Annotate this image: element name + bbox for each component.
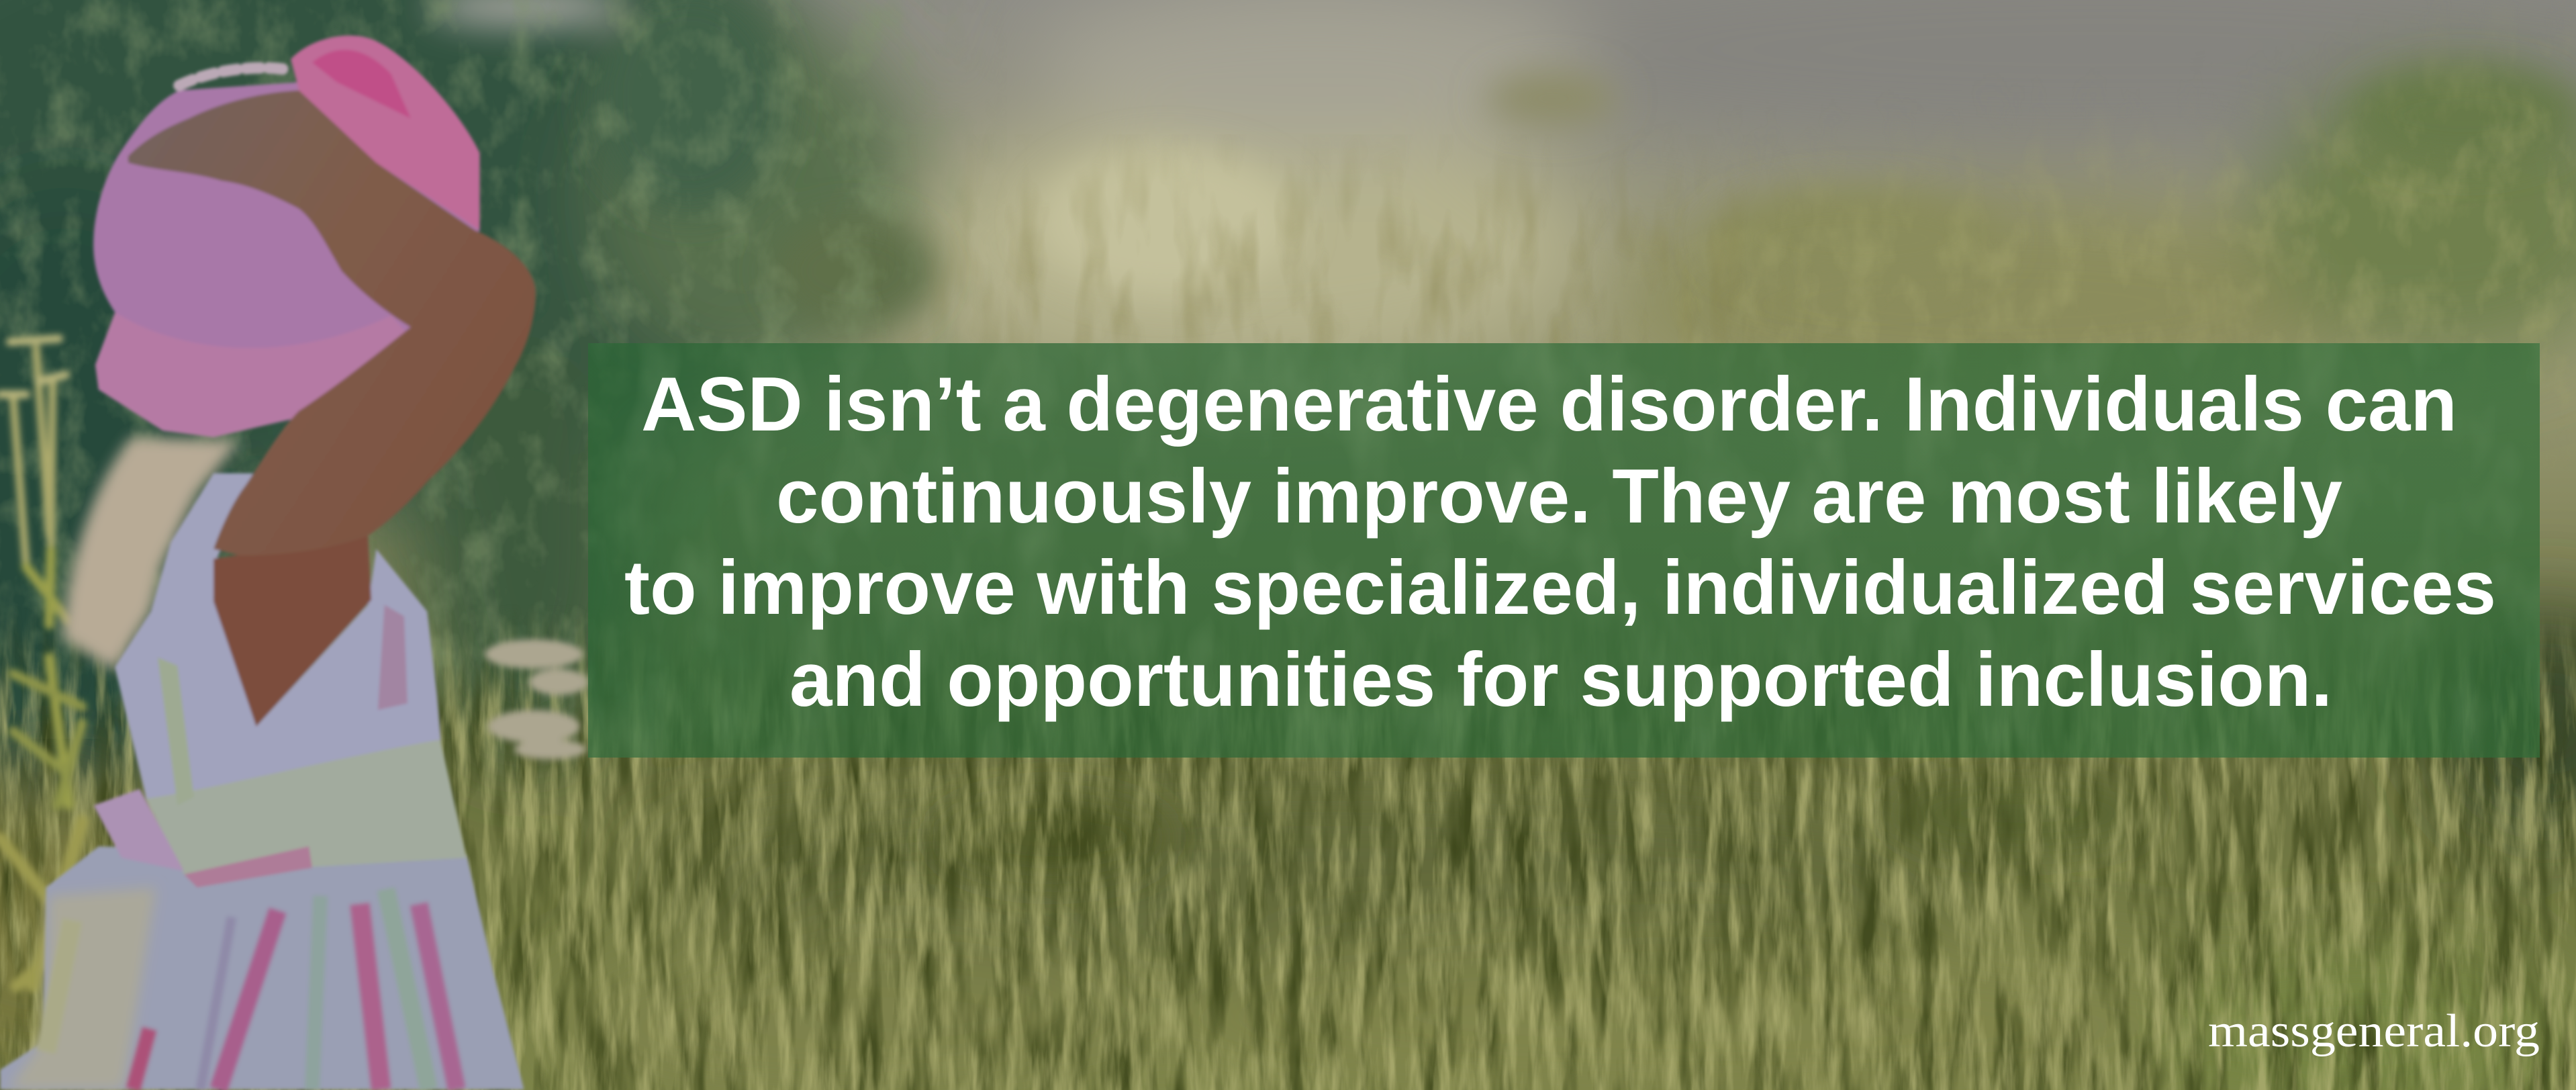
dress bodice bbox=[115, 473, 467, 874]
dress waist band bbox=[146, 739, 467, 874]
main statement text: ASD isn’t a degenerative disorder. Individuals can bbox=[641, 362, 2457, 447]
skirt stripes bbox=[46, 889, 457, 1089]
main statement text: and opportunities for supported inclusion. bbox=[790, 637, 2332, 723]
skirt left pale panel bbox=[8, 887, 156, 1089]
source wordmark: massgeneral.org bbox=[2208, 1005, 2540, 1057]
tree texture upper left bbox=[0, 0, 892, 739]
sky glow and dark tree edges bbox=[427, 0, 2576, 881]
dress bow bbox=[93, 789, 184, 871]
dress strap stripes bbox=[378, 605, 408, 710]
foreground plants at left edge bbox=[0, 338, 99, 986]
white flowers beside the girl bbox=[485, 639, 588, 760]
main statement text: to improve with specialized, individualized services bbox=[624, 545, 2496, 631]
text panel: green translucent box bbox=[588, 343, 2540, 758]
raised arm bbox=[128, 91, 536, 555]
hair bbox=[62, 437, 240, 670]
dress skirt bbox=[0, 846, 524, 1089]
girl in pink hat and striped dress bbox=[0, 36, 536, 1089]
hat lace trim bbox=[179, 68, 283, 85]
hat ribbon and flower bbox=[291, 36, 480, 230]
panel grass texture bbox=[588, 343, 2540, 758]
hat crown bbox=[93, 82, 480, 437]
bare back bbox=[213, 536, 371, 727]
bush texture upper right bbox=[1768, 77, 2574, 343]
main statement text: continuously improve. They are most likely bbox=[776, 454, 2342, 539]
grass texture lower half bbox=[0, 604, 2576, 1090]
main statement text bbox=[624, 362, 2496, 723]
hazy foliage texture centre bbox=[873, 134, 1813, 437]
hat brim bbox=[95, 312, 408, 437]
